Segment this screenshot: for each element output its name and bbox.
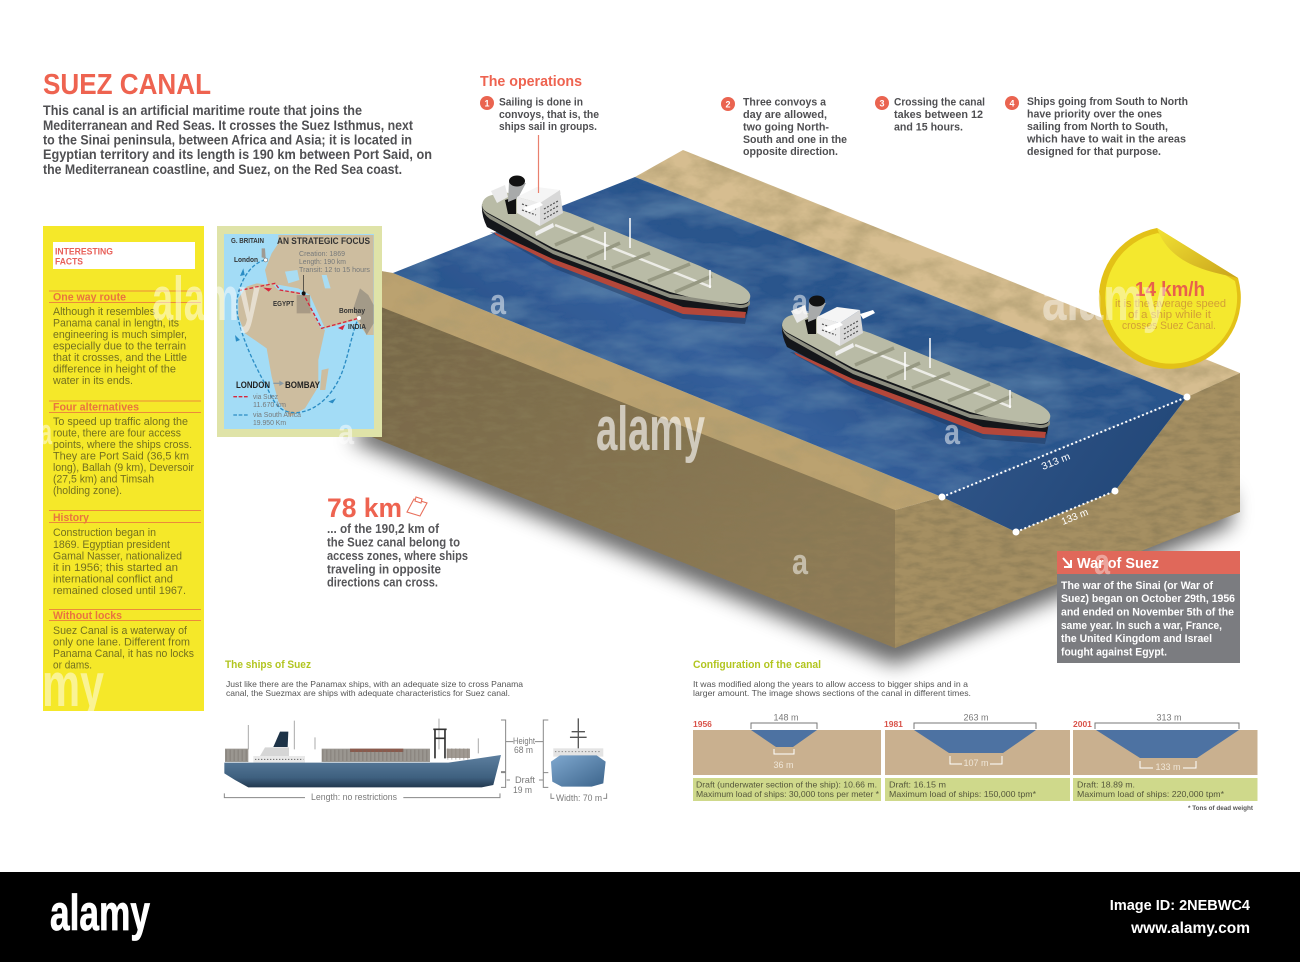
stock watermarks: a: [1094, 541, 1111, 582]
callout: 78 km: access zones, where ships: [327, 549, 468, 563]
step 2: day are allowed,: [743, 109, 827, 121]
callout: 14 km/h sticker: [1099, 228, 1241, 369]
front view ship: [551, 718, 606, 787]
callout: 14 km/h sticker: of a ship while it: [1128, 309, 1211, 321]
step 2: Three convoys a: [743, 96, 827, 108]
icon: clipboard: [407, 497, 427, 516]
fact: history: 1869. Egyptian president: [53, 539, 170, 551]
fact: history: international conflict and: [53, 574, 173, 586]
underwater section: [942, 397, 1187, 532]
section: the ships of suez: Draft: [515, 775, 535, 785]
panel: war of suez: the United Kingdom and Israel: [1061, 633, 1212, 645]
fact: history: Gamal Nasser, nationalized: [53, 550, 182, 562]
block shadow: [350, 420, 1232, 665]
title: SUEZ CANAL: [43, 69, 211, 101]
section 2001: Draft: 18.89 m.: [1077, 780, 1135, 790]
panel: war of suez: same year. In such a war, France,: [1061, 620, 1222, 632]
fact: four alternatives: To speed up traffic along the: [53, 416, 188, 428]
section: the ships of suez: The ships of Suez: [225, 659, 311, 671]
stock watermarks: [40, 265, 1167, 720]
map: strategic focus: EGYPT: [273, 301, 295, 308]
section 1956: 36 m: [773, 760, 794, 770]
stock watermarks: a: [944, 411, 961, 452]
map: strategic focus: 11.670 km: [253, 402, 286, 409]
section 1981: 107 m: [963, 758, 989, 768]
map: strategic focus: Length: 190 km: [299, 259, 346, 266]
section 1956: 1956: [693, 719, 712, 729]
stock watermarks: a: [338, 411, 355, 452]
section 1956: [693, 712, 881, 801]
fact: one way route: [49, 291, 201, 387]
heading: the operations: The operations: [480, 73, 582, 90]
fact: without locks: Panama Canal, it has no locks: [53, 648, 194, 660]
fact: one way route: water in its ends.: [52, 375, 133, 387]
ship dimensions: [224, 720, 607, 798]
fact: four alternatives: route, there are four access: [53, 428, 181, 440]
panel: war of suez: The war of the Sinai (or War of: [1061, 580, 1213, 592]
section 1981: 1981: [884, 719, 903, 729]
stock watermarks: my: [42, 651, 104, 720]
callout: 78 km: the Suez canal belong to: [327, 536, 460, 550]
map: strategic focus: [217, 226, 382, 437]
dimension: 133 m: 133 m: [1060, 507, 1090, 528]
step 4: which have to wait in the areas: [1026, 134, 1186, 146]
step 2: 2: [725, 100, 731, 110]
section 1956: Draft (underwater section of the ship): 10.66 m.: [696, 780, 877, 790]
section: the ships of suez: 19 m: [513, 785, 532, 795]
section: configuration of the canal: [693, 659, 1258, 812]
fact: history: [49, 510, 201, 597]
fact: four alternatives: They are Port Said (36,5 km: [53, 450, 189, 462]
step 2: [721, 96, 847, 158]
intro text: the Mediterranean coastline, and Suez, on the Red Sea coast.: [43, 162, 402, 177]
section 1956: Maximum load of ships: 30,000 tons per meter *: [696, 789, 880, 799]
canal block illustration: [350, 150, 1240, 665]
step 3: and 15 hours.: [894, 122, 963, 134]
fact: without locks: Suez Canal is a waterway of: [53, 625, 188, 637]
dimension: 133 m: [1012, 488, 1118, 536]
step 4: Ships going from South to North: [1027, 96, 1188, 108]
fact: one way route: difference in height of the: [53, 364, 176, 376]
step 3: 3: [879, 98, 885, 108]
ship 1: [482, 176, 750, 324]
intro text: This canal is an artificial maritime route that joins the: [43, 103, 362, 118]
section 1981: Draft: 16.15 m: [889, 780, 946, 790]
map: strategic focus: BOMBAY: [285, 380, 320, 390]
section: configuration of the canal: larger amount. The image shows sections of the canal in different times.: [693, 688, 971, 698]
near bank: [381, 271, 942, 510]
water surface: [393, 177, 1187, 497]
step 1: convoys, that is, the: [499, 109, 599, 121]
step 3: [875, 96, 985, 134]
stock watermarks: alamy: [152, 265, 260, 334]
fact: history: Construction began in: [53, 527, 156, 539]
icon: arrow: [1063, 558, 1071, 567]
fact: four alternatives: long), Ballah (9 km), Deversoir: [53, 462, 194, 474]
callout: 14 km/h sticker: it is the average speed: [1115, 298, 1226, 310]
fact: history: History: [53, 512, 90, 524]
step 1: Sailing is done in: [499, 96, 583, 108]
step 1: 1: [484, 98, 490, 108]
fact: one way route: that it crosses, and the Little: [53, 352, 187, 364]
section: the ships of suez: canal, the Suezmax are ships with adequate characteristics for Suez canal.: [226, 688, 510, 698]
fact: without locks: [49, 610, 201, 672]
map: strategic focus: Creation: 1869: [299, 251, 345, 258]
section 1981: [884, 712, 1070, 801]
step 4: have priority over the ones: [1027, 108, 1162, 120]
fact: four alternatives: (27,5 km) and Timsah: [53, 474, 154, 486]
section: the ships of suez: Just like there are the Panamax ships, with an adequate size to cross Panama: [226, 679, 523, 689]
section: the ships of suez: Length: no restrictions: [311, 792, 397, 802]
dimension: 313 m: 313 m: [1040, 451, 1072, 473]
intro text: Mediterranean and Red Seas. It crosses the Suez Isthmus, next: [43, 118, 413, 133]
pointer line from step 1: [538, 135, 540, 193]
section: the ships of suez: Width: 70 m: [556, 793, 602, 803]
callout: 78 km: traveling in opposite: [327, 562, 441, 576]
map: strategic focus: 19.950 Km: [253, 420, 286, 427]
callout: 78 km: directions can cross.: [327, 576, 438, 590]
fact: four alternatives: [49, 401, 201, 497]
map: strategic focus: Transit: 12 to 15 hours: [299, 267, 371, 274]
stock watermarks: a: [792, 541, 809, 582]
map: strategic focus: via South Africa: [253, 412, 301, 419]
intro text: to the Sinai peninsula, between Africa and Asia; it is located in: [43, 132, 412, 148]
section: configuration of the canal: Configuration of the canal: [693, 659, 821, 671]
step 4: designed for that purpose.: [1027, 146, 1161, 158]
step 4: sailing from North to South,: [1027, 121, 1168, 133]
stock watermarks: alamy: [1042, 265, 1167, 334]
stock watermarks: a: [792, 281, 809, 322]
side view ship: [224, 719, 501, 787]
step 1: [480, 96, 599, 133]
fact: four alternatives: Four alternatives: [53, 402, 139, 414]
section 2001: Maximum load of ships: 220,000 tpm*: [1077, 789, 1225, 799]
map: strategic focus: AN STRATEGIC FOCUS: [277, 236, 370, 246]
section 2001: 133 m: [1155, 762, 1181, 772]
stock footer band: Image ID: 2NEBWC4: [1110, 898, 1250, 914]
stock watermarks: a: [40, 411, 53, 452]
fact: history: remained closed until 1967.: [53, 585, 186, 597]
panel: interesting facts: [43, 226, 204, 711]
fact: one way route: One way route: [53, 292, 126, 304]
footnote: * Tons of dead weight: [1188, 805, 1254, 812]
panel: war of suez: War of Suez: [1077, 555, 1159, 572]
map: strategic focus: LONDON: [236, 380, 270, 390]
fact: four alternatives: (holding zone).: [53, 485, 122, 497]
section 2001: [1073, 712, 1258, 801]
fact: history: it in 1956; this started an: [53, 562, 178, 574]
callout: 78 km: 78 km: [327, 493, 402, 523]
intro text: Egyptian territory and its length is 190 km between Port Said, on: [43, 147, 432, 162]
fact: one way route: especially due to the terrain: [53, 340, 186, 352]
panel: war of suez: [1057, 551, 1240, 663]
section 1981: 263 m: [963, 712, 989, 722]
callout: 78 km: [327, 493, 468, 590]
panel: war of suez: and ended on November 5th of the: [1061, 606, 1234, 618]
fact: one way route: Panama canal in length, its: [53, 318, 179, 330]
section 1956: 148 m: [773, 712, 799, 722]
map: strategic focus: INDIA: [348, 324, 366, 331]
map: strategic focus: G. BRITAIN: [231, 238, 264, 245]
map land shapes: [233, 235, 374, 417]
section 1981: Maximum load of ships: 150,000 tpm*: [889, 789, 1037, 799]
section 2001: 2001: [1073, 719, 1092, 729]
fact: without locks: Without locks: [53, 610, 122, 622]
stock footer band: [0, 872, 1300, 962]
stock footer band: www.alamy.com: [1130, 920, 1250, 937]
fact: without locks: only one lane. Different from: [53, 636, 190, 648]
stock watermarks: alamy: [596, 395, 705, 464]
step 2: opposite direction.: [743, 146, 838, 158]
step 4: 4: [1009, 98, 1015, 108]
section: the ships of suez: [224, 659, 607, 803]
step 2: two going North-: [743, 122, 829, 134]
map: strategic focus: via Suez: [253, 394, 278, 401]
section: the ships of suez: Height: [513, 736, 535, 746]
callout: 14 km/h sticker: 14 km/h: [1135, 279, 1205, 301]
fact: one way route: engineering is much simpler,: [53, 329, 187, 341]
canal cross-section face: [895, 373, 1240, 648]
callout: 14 km/h sticker: crosses Suez Canal.: [1122, 320, 1216, 332]
step 4: [1005, 96, 1188, 158]
facts heading: INTERESTING: [55, 246, 113, 258]
intro text: [43, 103, 432, 177]
stock footer band: alamy: [50, 885, 150, 941]
step 2: South and one in the: [743, 134, 847, 146]
section: the ships of suez: 68 m: [514, 745, 533, 755]
step 3: Crossing the canal: [894, 96, 985, 108]
map: strategic focus: London: [234, 255, 258, 264]
far bank: [635, 150, 1240, 397]
facts heading: FACTS: [55, 256, 83, 268]
left soil face: [372, 290, 895, 648]
section 2001: 313 m: [1156, 712, 1182, 722]
facts heading: [53, 242, 195, 269]
fact: four alternatives: points, where the ships cross.: [53, 439, 192, 451]
step 3: takes between 12: [894, 109, 983, 121]
section: configuration of the canal: It was modified along the years to allow access to bigger ships and in a: [693, 679, 968, 689]
step 1: ships sail in groups.: [499, 121, 597, 133]
ship 2: [782, 296, 1050, 444]
dimension: 313 m: [938, 394, 1190, 500]
fact: without locks: or dams.: [53, 660, 92, 672]
fact: one way route: Although it resembles: [53, 306, 155, 318]
map: strategic focus: Bombay: [339, 308, 365, 315]
panel: war of suez: fought against Egypt.: [1061, 646, 1167, 658]
callout: 78 km: ... of the 190,2 km of: [327, 522, 440, 536]
panel: war of suez: Suez) began on October 29th, 1956: [1061, 593, 1235, 605]
stock watermarks: a: [490, 281, 507, 322]
